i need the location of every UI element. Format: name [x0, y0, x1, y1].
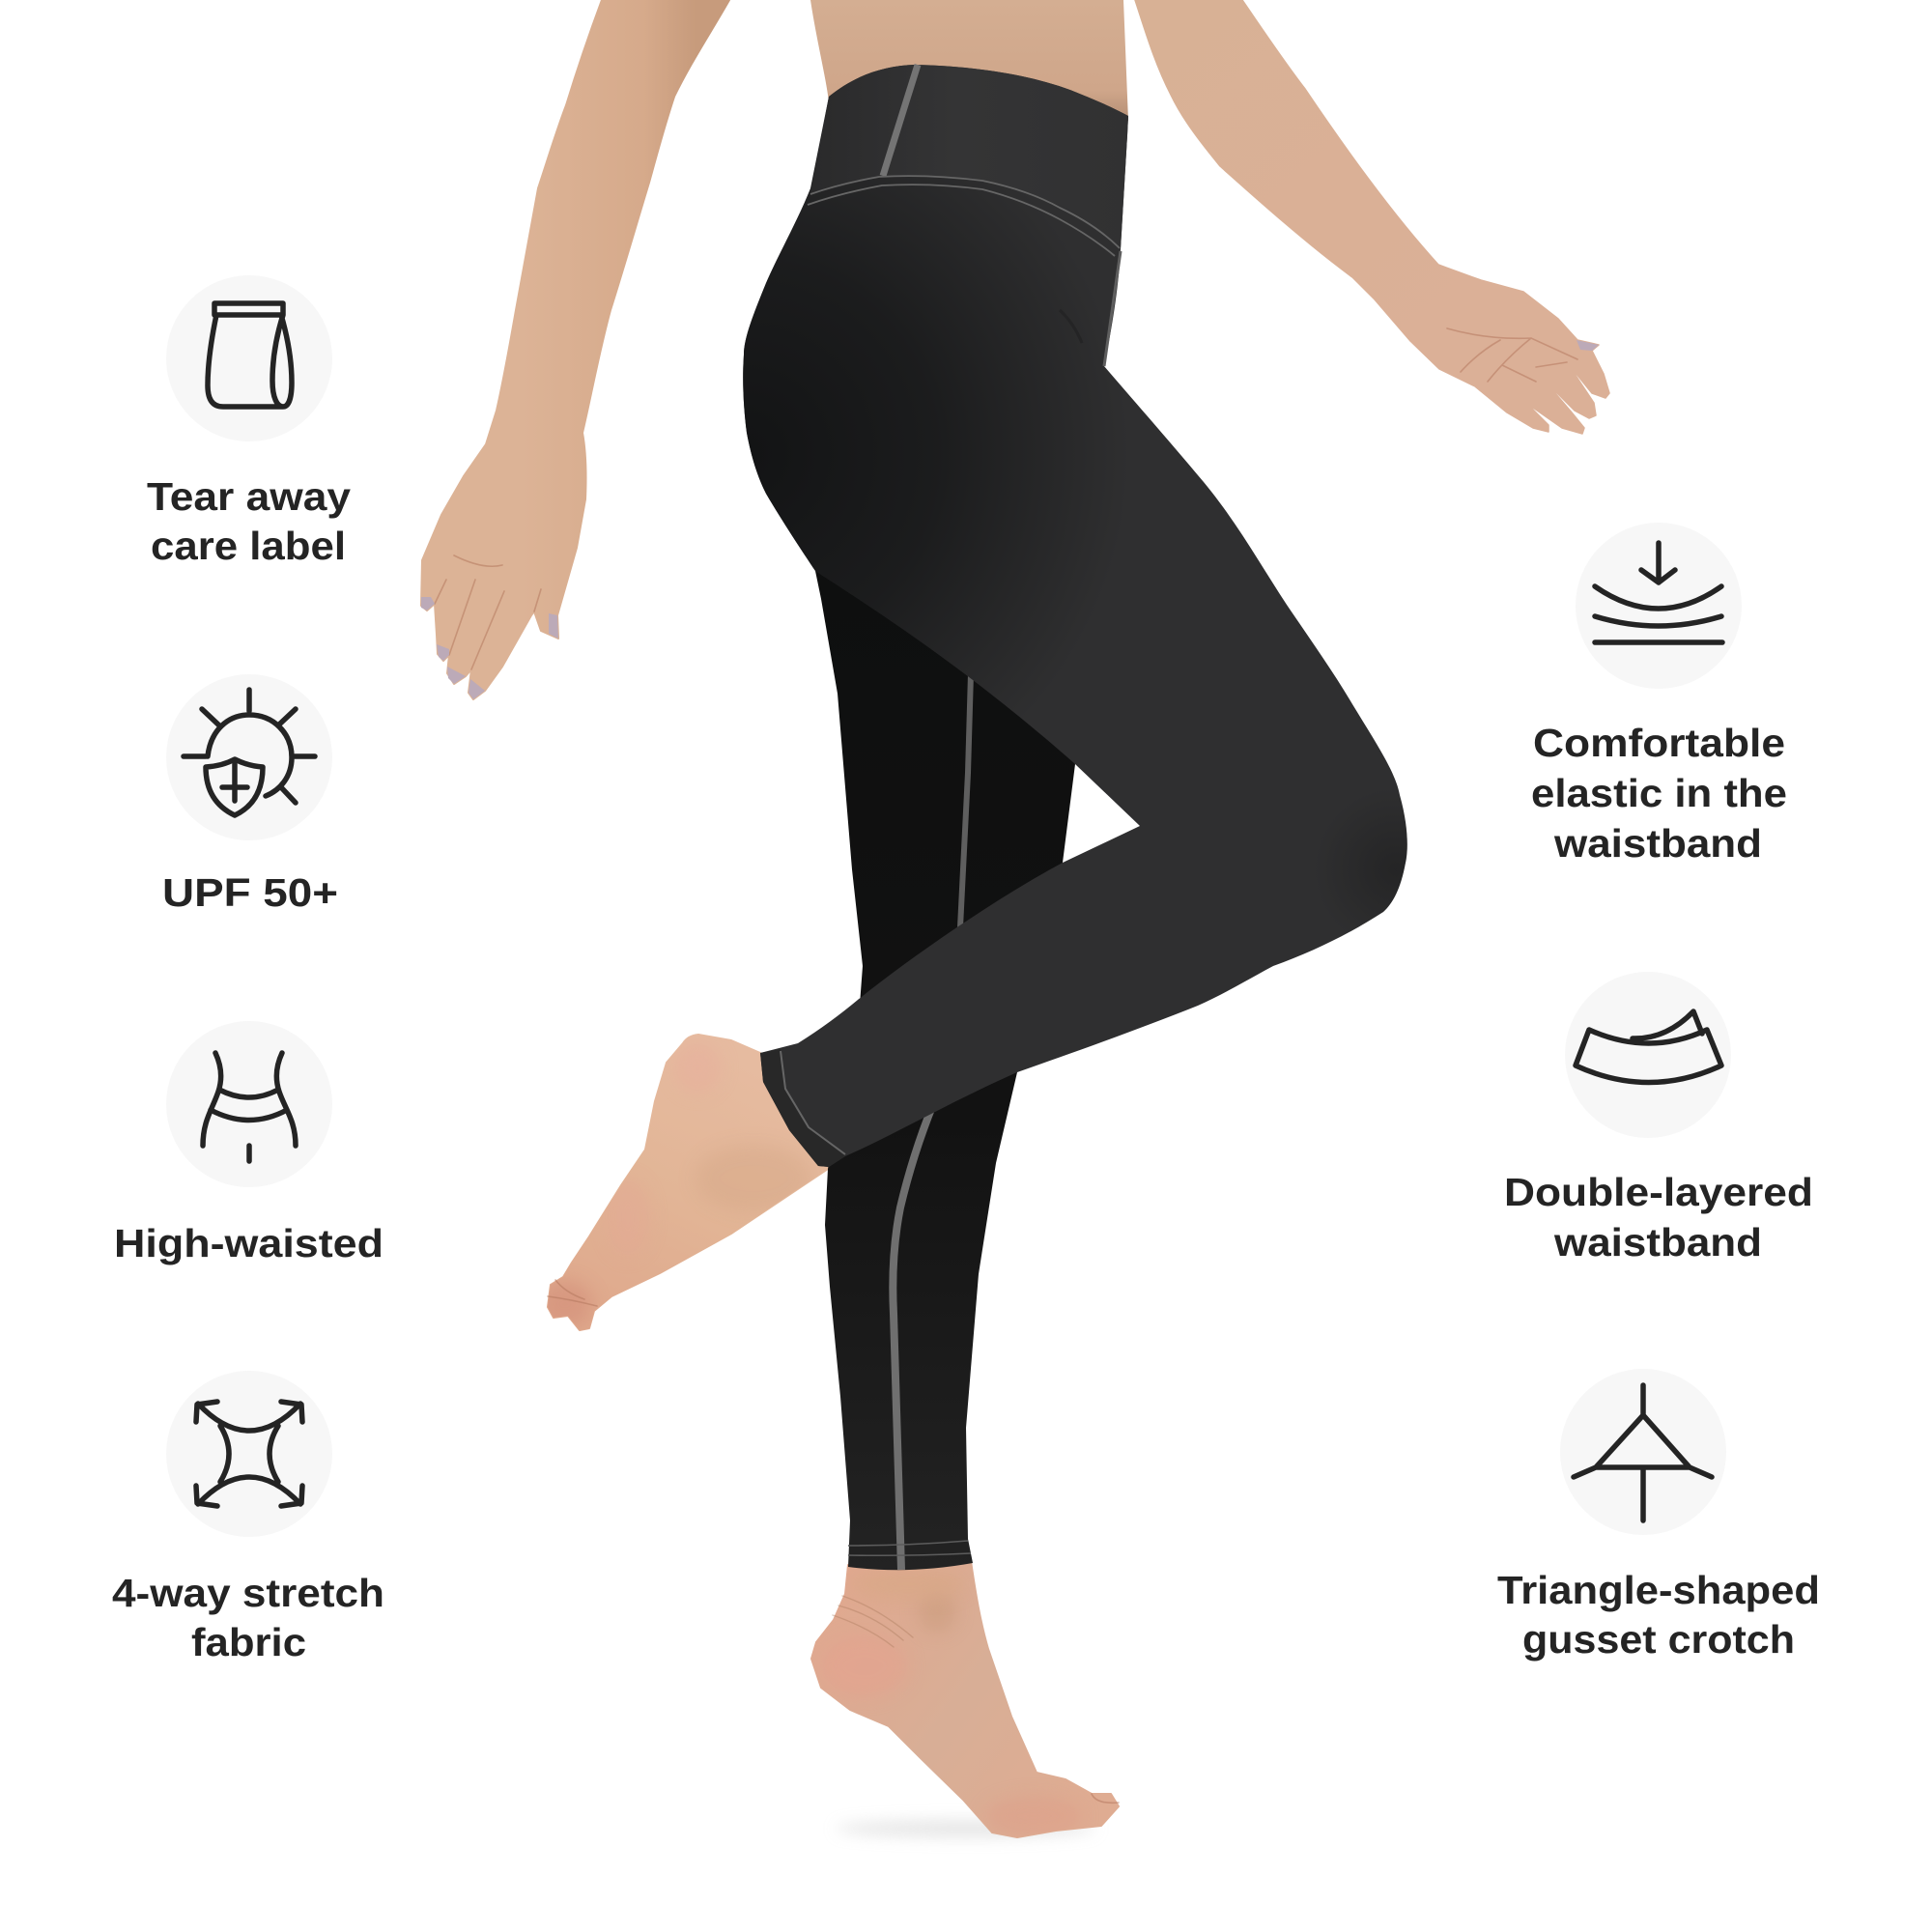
icon: compressing layers — [1576, 523, 1742, 689]
label: triangle-shaped gusset crotch: Triangle-shaped — [1497, 1568, 1820, 1612]
label: high-waisted: High-waisted — [114, 1221, 384, 1265]
waistband — [810, 65, 1128, 249]
icon: sun and shield — [166, 674, 332, 840]
torso — [810, 0, 1128, 121]
label: 4-way stretch fabric: 4-way stretch — [112, 1571, 384, 1615]
icon: gusset triangle — [1560, 1369, 1726, 1535]
front edge seam — [1104, 251, 1121, 366]
label: tear away care label — [147, 474, 351, 568]
icon: waist — [166, 1021, 332, 1187]
label: UPF 50+: UPF 50+ — [162, 870, 338, 915]
label: double-layered waistband: Double-layered — [1504, 1170, 1813, 1214]
feature: 4-way stretch fabric — [112, 1371, 384, 1664]
label: comfortable elastic in the waistband: Comfortable — [1533, 721, 1785, 765]
label: comfortable elastic in the waistband: elastic in the — [1531, 771, 1787, 815]
waistband seam — [883, 65, 918, 176]
icon: stretch arrows — [166, 1371, 332, 1537]
label: tear away care label: Tear away — [147, 474, 351, 519]
label: tear away care label: care label — [151, 524, 346, 568]
shading at the knee — [1368, 811, 1407, 922]
raised foot — [538, 1035, 831, 1330]
standing foot — [811, 1561, 1119, 1837]
left arm and hand — [421, 0, 729, 699]
icon: double layers — [1565, 972, 1731, 1138]
label: comfortable elastic in the waistband: waistband — [1553, 821, 1762, 866]
label: double-layered waistband: waistband — [1553, 1220, 1762, 1264]
product photo: model wearing leggings — [421, 0, 1609, 1837]
feature: comfortable elastic — [1531, 523, 1787, 866]
label: triangle-shaped gusset crotch — [1497, 1568, 1820, 1662]
feature: double-layered waistband — [1504, 972, 1813, 1264]
right arm and hand — [1135, 0, 1609, 434]
label: double-layered waistband — [1504, 1170, 1813, 1264]
feature: UPF 50+ — [162, 674, 338, 915]
label: 4-way stretch fabric — [112, 1571, 384, 1664]
label: comfortable elastic in the waistband — [1531, 721, 1787, 866]
raised leg ankle cuff — [760, 1049, 845, 1167]
shading on the hip and under the glute — [743, 117, 1049, 670]
raised leg and hip — [743, 65, 1407, 1167]
fold at hip — [1060, 310, 1082, 343]
standing leg ankle cuff stitching — [848, 1541, 971, 1555]
standing leg side seam — [960, 673, 971, 927]
waistband stitching — [808, 176, 1120, 256]
floor shadow — [836, 1821, 1096, 1836]
label: 4-way stretch fabric: fabric — [191, 1620, 306, 1664]
standing leg — [815, 541, 1075, 1570]
feature: triangle-shaped gusset crotch — [1497, 1369, 1820, 1662]
feature: tear away care label — [147, 275, 351, 568]
feature: high-waisted — [114, 1021, 384, 1265]
icon: care label bag — [166, 275, 332, 441]
label: triangle-shaped gusset crotch: gusset crotch — [1522, 1617, 1795, 1662]
